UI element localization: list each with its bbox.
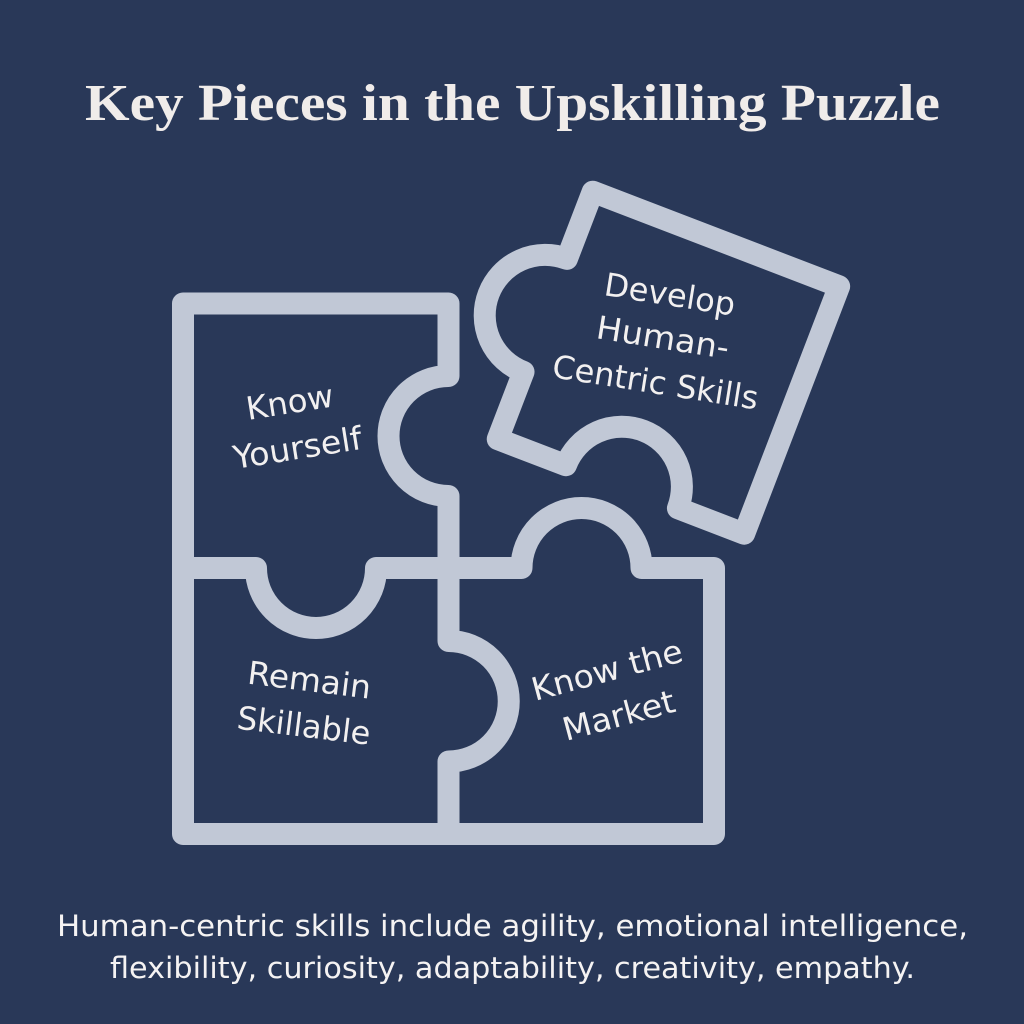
piece: know yourself — [183, 304, 448, 628]
label: develop human-centric skills: Centric Skills — [550, 347, 761, 417]
piece: develop human-centric skills (detached, rotated) — [441, 170, 839, 534]
label: know yourself: Know — [243, 377, 336, 428]
piece: know the market — [448, 508, 714, 834]
caption: flexibility, curiosity, adaptability, creativity, empathy. — [110, 951, 915, 985]
title: Key Pieces in the Upskilling Puzzle — [85, 75, 940, 132]
label: remain skillable: Remain — [246, 654, 373, 707]
label: know yourself — [229, 377, 365, 477]
label: develop human-centric skills: Develop — [602, 265, 738, 324]
label: know the market: Know the — [527, 632, 687, 709]
label: know the market: Market — [558, 682, 679, 749]
label: develop human-centric skills: Human- — [594, 308, 732, 367]
puzzle: three joined pieces — [183, 304, 714, 834]
label: know yourself: Yourself — [229, 419, 365, 477]
caption — [57, 909, 968, 985]
label: remain skillable: Skillable — [235, 699, 373, 753]
label: remain skillable — [235, 654, 373, 753]
piece: remain skillable — [183, 568, 509, 834]
label: know the market — [527, 632, 687, 749]
caption: Human-centric skills include agility, emotional intelligence, — [57, 909, 968, 943]
label: develop human-centric skills — [550, 265, 761, 417]
